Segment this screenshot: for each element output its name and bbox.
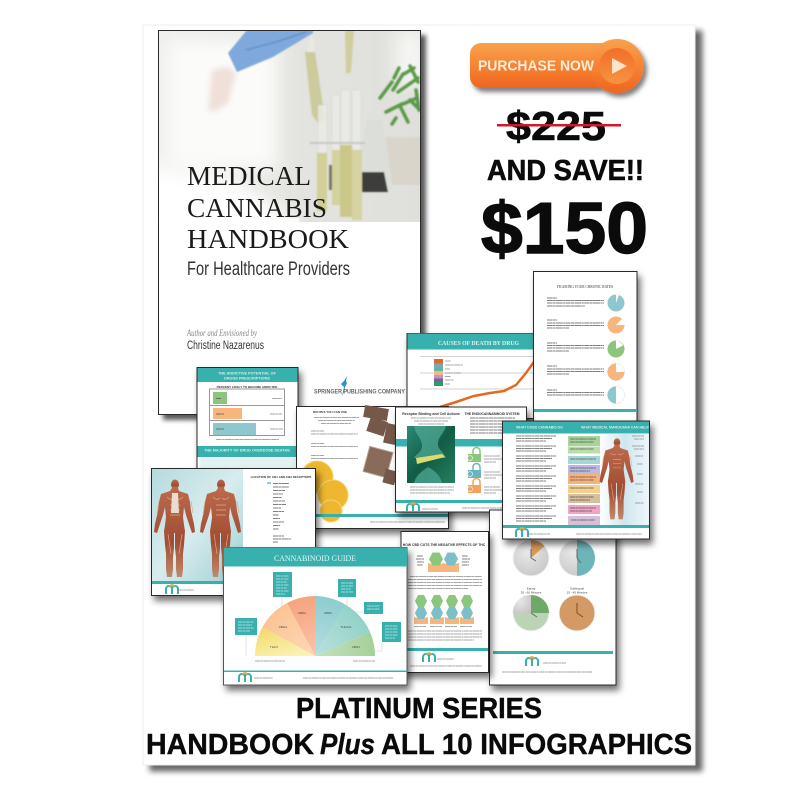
footer headline: HANDBOOK <box>146 729 314 761</box>
footer headline <box>146 693 692 761</box>
receptor locations footer logo <box>166 585 178 594</box>
infographic: cannabinoid guide <box>224 548 407 685</box>
book subtitle: For Healthcare Providers <box>187 259 350 280</box>
addictive heading: DRUGS PRESCRIPTIONS <box>224 376 270 380</box>
causes heading: CAUSES OF DEATH BY DRUG <box>438 340 519 347</box>
callout boxes <box>235 572 401 642</box>
infographic: receptor page: Receptor Binding and Cell Actions <box>402 412 460 416</box>
purchase button <box>470 39 644 93</box>
infographic: body systems page <box>502 421 650 539</box>
body figure <box>600 438 634 519</box>
purchase button: PURCHASE NOW <box>478 58 595 74</box>
old price: $225 <box>506 103 606 149</box>
receptors list: LOCATION OF CB1 AND CB2 RECEPTORS <box>251 475 311 479</box>
semicircle chart: CBGA <box>279 625 287 629</box>
clock faces <box>513 540 595 631</box>
semicircle chart: THCV <box>270 645 278 649</box>
clock labels: 15 - 45 Minutes <box>567 590 588 594</box>
infographic: addictive potential <box>197 368 298 472</box>
publisher logo <box>314 376 406 396</box>
book title: MEDICAL <box>187 161 311 191</box>
book author: Author and Envisioned by <box>186 329 258 339</box>
infographic: figuring your chronic rates <box>534 272 637 424</box>
clock footer logo <box>526 657 538 666</box>
chocolate text <box>311 410 359 458</box>
receptor image <box>407 426 455 483</box>
receptors list <box>251 475 311 542</box>
rates pie charts <box>608 294 624 404</box>
infographic: clock page <box>490 510 616 685</box>
colored condition boxes <box>568 436 600 525</box>
connector lines <box>246 597 382 656</box>
footer headline: PLATINUM SERIES <box>296 693 542 725</box>
back muscle figure <box>154 480 195 577</box>
footer headline: Plus <box>320 729 375 761</box>
semicircle chart: CBDV <box>324 611 332 615</box>
front muscle figure <box>200 480 241 577</box>
infographic: negative effects page: HOW CBD CUTS THE NEGATIVE EFFECTS OF THC <box>403 543 486 547</box>
semicircle chart: THCA/A <box>340 625 352 629</box>
clock labels: Eating <box>527 586 536 590</box>
symptom list <box>516 436 556 521</box>
hexagon diagram bottom <box>414 595 474 624</box>
book title: CANNABIS <box>187 193 327 223</box>
infographic: causes of death by drug <box>407 334 557 418</box>
body page headings: WHAT MEDICAL MARIJUANA CAN HELP <box>581 426 649 430</box>
body page headings: WHAT DOES CANNABIS DO <box>516 426 563 430</box>
book title: HANDBOOK <box>187 224 350 254</box>
semicircle chart <box>255 596 375 656</box>
book author <box>186 329 264 352</box>
chocolate text: ROUTES YOU CAN USE <box>313 410 347 414</box>
rates heading: FIGURING YOUR CHRONIC RATES <box>557 284 613 289</box>
hexagon diagram top <box>428 552 459 572</box>
footer headline: ALL 10 INFOGRAPHICS <box>381 729 692 761</box>
infographic: chocolate page <box>296 405 448 528</box>
addictive bar chart <box>210 392 285 435</box>
lock icons <box>468 448 481 493</box>
clock labels <box>521 586 588 594</box>
body page footer logo <box>516 528 528 537</box>
clock labels: 30 - 60 Minutes <box>521 590 542 594</box>
infographic: addictive potential: THE MAJORITY OF DRUG OVERDOSE DEATHS <box>204 448 290 452</box>
new price: $150 <box>481 189 648 269</box>
causes legend <box>434 359 463 386</box>
infographic: receptor page <box>396 407 526 512</box>
addictive heading: THE ADDICTIVE POTENTIAL OF <box>218 372 277 376</box>
infographic: receptor locations page <box>152 468 316 596</box>
and save: AND SAVE!! <box>487 155 644 187</box>
page panel <box>143 25 695 765</box>
infographic: negative effects page <box>401 532 488 672</box>
chocolate image <box>363 405 399 485</box>
semicircle chart: CBGV <box>352 645 360 649</box>
orange slices <box>301 461 348 522</box>
infographic: addictive potential: PERCENT LIKELY TO BECOME ADDICTED <box>217 385 278 389</box>
semicircle axis labels <box>255 660 375 662</box>
causes line chart <box>440 347 542 407</box>
body page headings <box>516 426 649 430</box>
book author: Christine Nazarenus <box>187 340 264 352</box>
book cover <box>145 30 425 414</box>
infographic: receptor page: THE ENDOCANNABINOID SYSTEM <box>465 412 520 416</box>
addictive heading <box>218 372 277 380</box>
rates text rows <box>547 298 604 395</box>
cannabinoid footer logo <box>239 673 251 682</box>
negative effects footer logo <box>423 653 435 662</box>
cannabinoid heading: CANNABINOID GUIDE <box>274 553 356 563</box>
publisher logo: SPRINGER PUBLISHING COMPANY <box>314 388 406 396</box>
cover photo: lab test tubes <box>159 31 420 222</box>
semicircle chart: CBDA <box>298 611 306 615</box>
clock labels: Sublingual <box>570 586 584 590</box>
receptor footer logo <box>407 503 419 512</box>
book title <box>187 161 350 254</box>
